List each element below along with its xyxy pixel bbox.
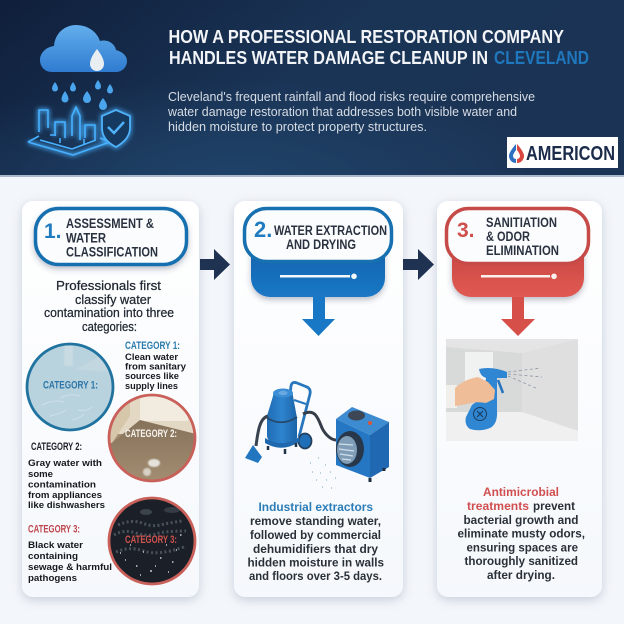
icon: shield with check <box>102 110 130 147</box>
step 3 header pill: SANITIATION <box>486 215 557 230</box>
header banner <box>0 0 624 177</box>
panel: step 3 sanitation <box>437 201 602 597</box>
step 1 intro text: classify water <box>75 292 152 307</box>
step 1 intro text <box>44 278 174 334</box>
step 3 description: ensuring spaces are <box>466 542 579 554</box>
arrow: step 1 to step 2 <box>200 249 230 280</box>
step 3 description: Antimicrobial <box>483 486 559 499</box>
category 3 description: Black water <box>28 540 83 551</box>
step 1 header pill: ASSESSMENT & <box>66 216 154 231</box>
step 1 header pill <box>36 208 186 264</box>
step 3 description <box>458 486 585 582</box>
step 3 header pill: 3. <box>457 219 475 242</box>
category 2 description: from appliances <box>28 490 102 501</box>
title: HOW A PROFESSIONAL RESTORATION COMPANY <box>168 26 565 47</box>
category 2 circle image <box>108 394 196 485</box>
step 2 description: remove standing water, <box>250 515 381 528</box>
category 2 description: some <box>28 469 53 480</box>
category 3 description: containing <box>28 551 78 562</box>
category 3 description: CATEGORY 3: <box>28 524 80 536</box>
intro paragraph: hidden moisture to protect property structures. <box>168 119 427 134</box>
category 3 circle image: CATEGORY 3: <box>125 534 177 546</box>
panel: step 2 extraction <box>234 201 403 597</box>
step 3 header pill: & ODOR <box>486 229 530 244</box>
category 2 description: like dishwashers <box>28 500 105 511</box>
step 2 description: and floors over 3-5 days. <box>249 570 382 583</box>
category 1 description: CATEGORY 1: <box>125 340 180 352</box>
step 3 description: treatments <box>467 500 529 513</box>
icon: cloud <box>40 25 127 72</box>
category 1 circle image <box>27 340 118 430</box>
category 2 description <box>28 441 105 511</box>
arrow: down blue <box>302 297 335 336</box>
icon: city skyline <box>28 107 110 155</box>
step 3 header pill <box>446 208 588 264</box>
step 3 header pill: ELIMINATION <box>486 243 559 258</box>
icon: rain cloud over city with shield <box>28 25 130 155</box>
category 1 description: supply lines <box>125 381 178 392</box>
step 3 description: prevent <box>533 500 575 513</box>
step 1 header pill: WATER <box>66 230 106 246</box>
arrow: step 2 to step 3 <box>403 249 434 280</box>
logo: Americon <box>507 137 618 168</box>
icon: extractor vacuum <box>245 382 336 463</box>
category 2 description: contamination <box>28 480 96 490</box>
step 2 header pill: WATER EXTRACTION <box>274 223 387 238</box>
step 2 description: followed by commercial <box>250 529 381 542</box>
icon: dehumidifier <box>336 407 389 482</box>
icon: mist droplets <box>310 458 336 488</box>
step 2 header pill: 2. <box>254 217 272 242</box>
step 1 header pill: CLASSIFICATION <box>66 244 158 260</box>
step 3 description: eliminate musty odors, <box>458 528 585 540</box>
step 3 description: thoroughly sanitized <box>464 555 578 568</box>
category 2 description: CATEGORY 2: <box>31 441 82 453</box>
step 1 intro text: Professionals first <box>56 278 161 293</box>
category 1 circle image: CATEGORY 1: <box>43 380 98 392</box>
intro paragraph: Cleveland's frequent rainfall and flood risks require comprehensive <box>168 89 535 104</box>
step 2 description: hidden moisture in walls <box>248 556 384 570</box>
category 3 description: sewage & harmful <box>28 562 112 573</box>
title <box>168 26 589 68</box>
step 2 description <box>248 501 384 583</box>
title: HANDLES WATER DAMAGE CLEANUP IN <box>169 47 488 68</box>
step 3 red tab <box>452 240 584 297</box>
category 3 circle image <box>109 498 195 584</box>
category 1 description: Clean water <box>125 352 178 363</box>
step 2 header pill <box>244 208 392 262</box>
step 1 intro text: contamination into three <box>44 305 174 320</box>
category 2 circle image: CATEGORY 2: <box>125 428 177 440</box>
image: spray bottle in empty room <box>446 339 578 441</box>
panel: step 1 assessment <box>22 201 199 597</box>
step 2 blue tab <box>251 240 385 297</box>
step 1 intro text: categories: <box>82 319 137 334</box>
arrow: down red <box>501 297 535 336</box>
step 2 header pill: AND DRYING <box>286 237 356 252</box>
step 2 description: dehumidifiers that dry <box>253 543 379 556</box>
intro paragraph <box>167 89 535 134</box>
step 3 description: after drying. <box>487 569 555 582</box>
category 2 description: Gray water with <box>28 458 102 469</box>
step 2 description: Industrial extractors <box>258 501 373 514</box>
title: CLEVELAND <box>494 47 589 68</box>
category 3 description: pathogens <box>28 573 77 584</box>
category 1 description: from sanitary <box>125 362 187 372</box>
category 3 description <box>28 524 112 584</box>
step 3 description: bacterial growth and <box>464 514 578 527</box>
category 1 description <box>125 340 187 392</box>
intro paragraph: water damage restoration that addresses both visible water and <box>167 104 517 119</box>
category 1 description: sources like <box>125 371 179 382</box>
step 1 header pill: 1. <box>44 220 62 243</box>
icon: rain drops <box>52 80 113 110</box>
